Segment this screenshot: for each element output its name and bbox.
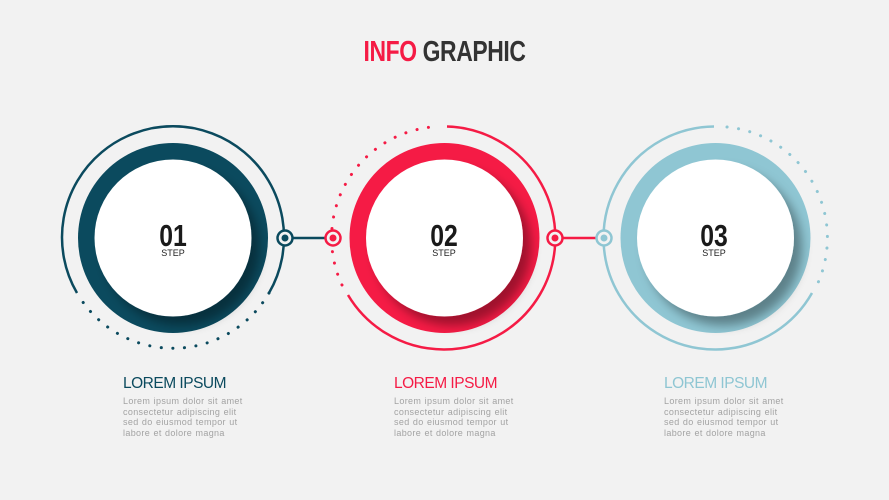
text block 3: consectetur adipiscing elit bbox=[664, 407, 778, 417]
step 1: STEP bbox=[161, 248, 185, 258]
text block 1: sed do eiusmod tempor ut bbox=[123, 417, 237, 427]
text block 3: sed do eiusmod tempor ut bbox=[664, 417, 778, 427]
text block 1: labore et dolore magna bbox=[123, 428, 225, 438]
step 1: 01 bbox=[159, 218, 187, 253]
text block 1: consectetur adipiscing elit bbox=[123, 407, 237, 417]
step 1 bbox=[62, 126, 292, 348]
text block 2: labore et dolore magna bbox=[394, 428, 496, 438]
text block 3: Lorem ipsum dolor sit amet bbox=[664, 396, 784, 406]
step 2 bbox=[326, 126, 562, 349]
step 3: STEP bbox=[702, 248, 726, 258]
text block 2 bbox=[394, 375, 514, 438]
text block 3: labore et dolore magna bbox=[664, 428, 766, 438]
title: INFO GRAPHIC bbox=[363, 36, 525, 68]
text block 1: Lorem ipsum dolor sit amet bbox=[123, 396, 243, 406]
text block 1 bbox=[123, 375, 243, 438]
text block 3: LOREM IPSUM bbox=[664, 375, 767, 392]
step 3: 03 bbox=[700, 218, 728, 253]
text block 2: consectetur adipiscing elit bbox=[394, 407, 508, 417]
text block 2: Lorem ipsum dolor sit amet bbox=[394, 396, 514, 406]
step 2: 02 bbox=[430, 218, 458, 253]
step 3 bbox=[596, 126, 827, 349]
text block 2: sed do eiusmod tempor ut bbox=[394, 417, 508, 427]
connector lines bbox=[285, 237, 604, 239]
step 2: STEP bbox=[432, 248, 456, 258]
text block 1: LOREM IPSUM bbox=[123, 375, 226, 392]
text block 2: LOREM IPSUM bbox=[394, 375, 497, 392]
text block 3 bbox=[664, 375, 784, 438]
